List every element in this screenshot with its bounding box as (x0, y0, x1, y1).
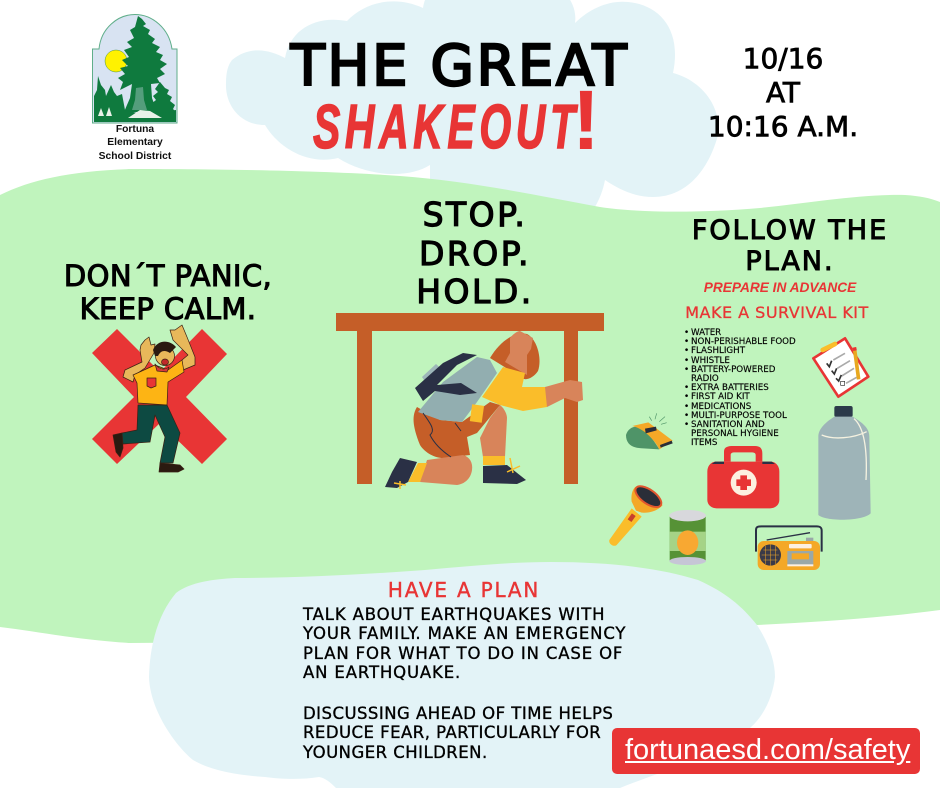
survival kit list: NON-PERISHABLE FOOD (691, 337, 796, 347)
table (336, 313, 604, 484)
text: talk about earthquakes: YOUR FAMILY. MAKE AN EMERGENCY (303, 624, 626, 643)
logo caption (99, 124, 172, 162)
text: • (684, 411, 689, 421)
date and time: AT (766, 76, 800, 109)
survival kit list: FIRST AID KIT (691, 392, 750, 402)
title line 1: THE GREAT (291, 34, 629, 99)
red X (92, 329, 227, 464)
text: • (684, 383, 689, 393)
exclamation mark: ! (572, 73, 600, 167)
survival kit list: ITEMS (691, 438, 717, 448)
heading: follow the plan (692, 215, 888, 277)
text: • (684, 420, 689, 430)
bottom cloud (149, 562, 775, 788)
date and time (708, 42, 858, 143)
text: discussing ahead of time: DISCUSSING AHEAD OF TIME HELPS (303, 704, 613, 723)
heading: follow the plan: FOLLOW THE (692, 215, 888, 246)
survival kit icons (609, 336, 871, 570)
text: • (684, 365, 689, 375)
icon: panicking person on red X (92, 324, 227, 472)
icon: clipboard (813, 338, 868, 397)
text: • (684, 356, 689, 366)
title (289, 34, 629, 167)
icon: sun (105, 50, 127, 72)
icon: person kneeling under table (336, 313, 604, 489)
survival kit list: WATER (691, 328, 721, 338)
text: • (684, 346, 689, 356)
text: talk about earthquakes (302, 605, 626, 682)
logo: Fortuna Elementary School District (92, 14, 178, 162)
survival kit list: SANITATION AND (691, 420, 765, 430)
heading: don't panic: DON´T PANIC, (64, 259, 272, 293)
text: discussing ahead of time (302, 704, 613, 762)
text: talk about earthquakes: AN EARTHQUAKE. (303, 663, 461, 682)
heading: don't panic (64, 259, 272, 326)
heading: follow the plan: PLAN. (745, 246, 835, 277)
person (113, 325, 195, 472)
heading: have a plan: HAVE A PLAN (388, 578, 540, 602)
survival kit list (684, 328, 796, 448)
icon: radio (756, 526, 822, 570)
green band (0, 169, 940, 643)
survival kit list: PERSONAL HYGIENE (691, 429, 779, 439)
date and time: 10:16 A.M. (708, 110, 858, 143)
person (422, 364, 446, 389)
icon: food can (669, 510, 706, 565)
survival kit list: RADIO (691, 374, 719, 384)
date and time: 10/16 (743, 42, 823, 75)
survival kit list: MULTI-PURPOSE TOOL (691, 411, 787, 421)
logo caption: Elementary (107, 137, 163, 148)
logo caption: School District (99, 150, 171, 162)
survival kit list: WHISTLE (691, 356, 730, 366)
logo caption: Fortuna (116, 124, 154, 134)
text: discussing ahead of time: REDUCE FEAR, PARTICULARLY FOR (303, 723, 601, 742)
callout: website link: fortunaesd.com/safety (625, 734, 910, 766)
text: • (684, 328, 689, 338)
top cloud (226, 0, 718, 215)
text: talk about earthquakes: TALK ABOUT EARTHQUAKES WITH (303, 605, 605, 624)
icon: whistle (626, 413, 673, 449)
text: talk about earthquakes: PLAN FOR WHAT TO DO IN CASE OF (303, 644, 623, 663)
text: • (684, 402, 689, 412)
survival kit list: BATTERY-POWERED (691, 365, 775, 375)
survival kit list: EXTRA BATTERIES (691, 383, 769, 393)
subheading: prepare in advance: PREPARE IN ADVANCE (704, 280, 856, 295)
heading: stop drop hold: STOP. (423, 195, 527, 234)
survival kit list: MEDICATIONS (691, 402, 751, 412)
survival kit list: FLASHLIGHT (691, 346, 745, 356)
text: • (684, 337, 689, 347)
icon: water bottle (818, 406, 871, 520)
text: discussing ahead of time: YOUNGER CHILDREN. (303, 743, 488, 762)
heading: stop drop hold: HOLD. (416, 272, 534, 311)
heading: stop drop hold: DROP. (419, 234, 531, 272)
heading: stop drop hold (416, 195, 534, 311)
heading: don't panic: KEEP CALM. (80, 292, 256, 326)
icon: first aid kit (707, 446, 779, 508)
icon: redwood tree (94, 16, 176, 122)
callout: website link (612, 728, 920, 774)
subheading: make a survival kit: MAKE A SURVIVAL KIT (685, 303, 869, 322)
text: • (684, 392, 689, 402)
title line 2: SHAKEOUT (313, 93, 580, 162)
icon: flashlight (609, 482, 665, 546)
